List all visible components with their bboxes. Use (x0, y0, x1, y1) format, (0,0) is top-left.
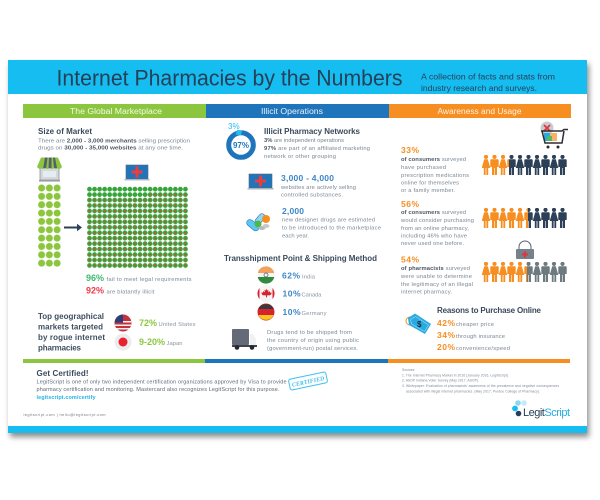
donut chart (229, 130, 253, 157)
stat: 54%: of pharmacists surveyed (401, 266, 470, 272)
stat: Germany: Germany (302, 311, 327, 317)
stat: 54%: internet pharmacy. (401, 290, 452, 296)
stat: Japan (139, 337, 182, 347)
get certified text: LegitScript is one of only two independent certification organizations approved by Visa to provide (36, 380, 286, 386)
people chart 54% (482, 262, 567, 282)
icon: laptop with cross (248, 174, 274, 190)
top markets heading (38, 312, 105, 352)
panel: global marketplace (37, 127, 196, 352)
icon: Germany flag (258, 304, 274, 320)
shipping text: (government-run) postal services. (267, 346, 358, 352)
icon: laptop with cross (124, 165, 150, 180)
icon: Japan flag (114, 334, 132, 350)
networks text (264, 138, 370, 160)
arrow (64, 224, 82, 231)
stat: 33%: online for themselves (401, 180, 459, 186)
icon: delivery truck (232, 329, 257, 350)
heading: illicit operations: Illicit Operations (261, 107, 323, 116)
shipping text: the country of origin using public (267, 338, 359, 344)
contact line: legitscript.com | hello@legitscript.com (24, 412, 106, 417)
stat: 3,000 - 4,000: 3,000 - 4,000 (281, 173, 334, 183)
stat: India (282, 270, 316, 280)
networks heading: Illicit Pharmacy Networks (264, 127, 361, 136)
stat: United States (139, 318, 196, 328)
LegitScript logo (512, 400, 570, 419)
subtitle: A collection of facts and stats from (421, 72, 555, 82)
reason 34%: through insurance (456, 334, 505, 340)
size of market heading: Size of Market (38, 127, 92, 136)
icon: medical bag (516, 241, 534, 259)
stat: 56%: would consider purchasing (400, 218, 474, 224)
stat: 3,000 - 4,000: websites are actively selling (280, 185, 356, 191)
icon: Canada flag (257, 285, 275, 302)
networks text: network or other grouping (264, 154, 336, 160)
heading: awareness and usage (389, 104, 571, 118)
store dots (38, 184, 61, 268)
get certified heading: Get Certified! (36, 369, 88, 378)
certify link: legitscript.com/certify (36, 395, 96, 401)
stat: 56% (400, 199, 474, 247)
stat: 56%: never used one before. (401, 241, 464, 247)
top markets heading: pharmacies (38, 344, 82, 352)
stat: 2,000: to be introduced to the marketplace (282, 226, 381, 232)
stat: 96%: fail to meet legal requirements (106, 277, 192, 283)
icon: pills (245, 212, 270, 232)
stat: 92% (86, 286, 155, 296)
heading: global marketplace: The Global Marketplace (70, 107, 163, 116)
card background (8, 60, 587, 433)
stat: Germany (282, 307, 327, 317)
networks text: 3% are independent operations (264, 138, 344, 144)
top markets heading: by rogue internet (38, 333, 105, 342)
sources: 3. Whitepaper: Evaluation of pharmacists' awareness of the prevalence and negative consequences (402, 384, 559, 388)
stat: Canada (282, 288, 322, 298)
shipping text (267, 330, 359, 352)
panel: illicit operations (224, 122, 381, 352)
stat: 2,000: new designer drugs are estimated (282, 218, 375, 224)
people chart 33% (482, 155, 567, 175)
reasons heading: Reasons to Purchase Online (437, 306, 542, 315)
stat: 92%: 92% (86, 286, 104, 296)
reason 20%: convenience/speed (456, 346, 510, 352)
header band (8, 60, 587, 94)
heading: illicit operations (206, 104, 389, 118)
stat: India: India (302, 274, 316, 280)
icon: US flag (114, 314, 132, 332)
stat: 54%: were unable to determine (400, 274, 472, 280)
stat: 2,000 (282, 206, 381, 240)
top markets heading: markets targeted (38, 322, 103, 332)
stat: United States: 72% (139, 318, 157, 328)
stat: 54%: 54% (401, 254, 419, 264)
sources (402, 368, 559, 394)
stat: 54% (400, 254, 473, 296)
donut chart: 97% (233, 141, 249, 150)
stat: 56%: of consumers surveyed (401, 210, 466, 216)
website dots grid (87, 186, 188, 268)
stat: 2,000: 2,000 (282, 206, 304, 216)
size of market text (38, 138, 190, 152)
stat: 56%: from an online pharmacy, (401, 226, 469, 232)
stat: 33%: 33% (401, 145, 419, 155)
footer divider (23, 359, 570, 363)
stat: 56%: including 46% who have (401, 234, 467, 240)
bottom band (8, 426, 587, 433)
icon: shopping cart (540, 122, 568, 148)
stat: 92%: are blatantly illicit (106, 290, 155, 296)
title: Internet Pharmacies by the Numbers (56, 66, 402, 90)
stat: India: 62% (282, 270, 300, 280)
sources: associated with illegal internet pharmacies. (May 2017, Purdue College of Pharmacy). (406, 390, 540, 394)
sources: 1. The Internet Pharmacy Market in 2016 (January 2016, LegitScript). (402, 374, 509, 378)
reason 42% (437, 318, 494, 328)
reason 42%: 42% (437, 318, 455, 328)
stat: Japan: 9-20% (139, 337, 165, 347)
reason 34% (437, 330, 505, 340)
size of market text: drugs on 30,000 - 35,000 websites at any one time. (38, 146, 183, 152)
stat: 33%: of consumers surveyed (401, 157, 466, 163)
stat: United States: United States (158, 322, 196, 328)
stat: 3,000 - 4,000 (280, 173, 356, 198)
icon: India flag (258, 266, 274, 284)
subtitle (421, 72, 555, 93)
certified stamp (288, 372, 328, 390)
stat: Germany: 10% (282, 307, 301, 317)
reason 20% (437, 342, 510, 352)
stat: 96% (86, 273, 192, 283)
heading: awareness and usage: Awareness and Usage (438, 107, 522, 116)
stat: Canada: 10% (282, 288, 301, 298)
card shadow (10, 64, 589, 437)
stat: 33%: prescription medications (401, 173, 469, 179)
stat: 56%: 56% (401, 199, 419, 209)
get certified text: pharmacy certification and monitoring. Mastercard also recognizes LegitScript for this purpose. (36, 387, 280, 393)
reason 42%: cheaper price (456, 322, 494, 328)
transshipment heading: Transshipment Point & Shipping Method (224, 254, 377, 263)
panel: get certified (24, 369, 328, 417)
subtitle: industry research and surveys. (421, 84, 537, 93)
icon: storefront (37, 158, 62, 182)
get certified text (36, 380, 286, 393)
top markets heading: Top geographical (38, 312, 104, 321)
LegitScript logo: LegitScript (523, 407, 570, 419)
heading: global marketplace (23, 104, 206, 118)
size of market text: There are 2,000 - 3,000 merchants selling prescription (38, 138, 190, 144)
stat: Japan: Japan (166, 341, 182, 347)
people chart 56% (482, 208, 567, 228)
icon: price tag (406, 314, 431, 334)
stat: 33%: or a family member. (401, 188, 455, 194)
stat: Canada: Canada (302, 292, 322, 298)
icon: price tag: $ (417, 320, 422, 329)
stat: 2,000: each year. (282, 234, 309, 240)
certified stamp: CERTIFIED (292, 376, 326, 389)
stat: 96%: 96% (86, 273, 104, 283)
sources: Sources: (402, 368, 415, 372)
stat: 33%: have purchased (401, 165, 446, 171)
section heading bars (23, 104, 571, 118)
reason 20%: 20% (437, 342, 455, 352)
sources: 2. ASOP Indiana Voter Survey (May 2017, ASOP). (402, 378, 479, 382)
stat: 54%: the legitimacy of an illegal (401, 282, 473, 288)
stat: 33% (401, 145, 469, 194)
stat: 3,000 - 4,000: controlled substances. (281, 192, 343, 198)
shipping text: Drugs tend to be shipped from (267, 330, 352, 336)
networks text: 97% are part of an affiliated marketing (264, 146, 370, 152)
label: 3%: 3% (228, 122, 240, 131)
panel: awareness and usage (400, 122, 568, 352)
reason 34%: 34% (437, 330, 455, 340)
